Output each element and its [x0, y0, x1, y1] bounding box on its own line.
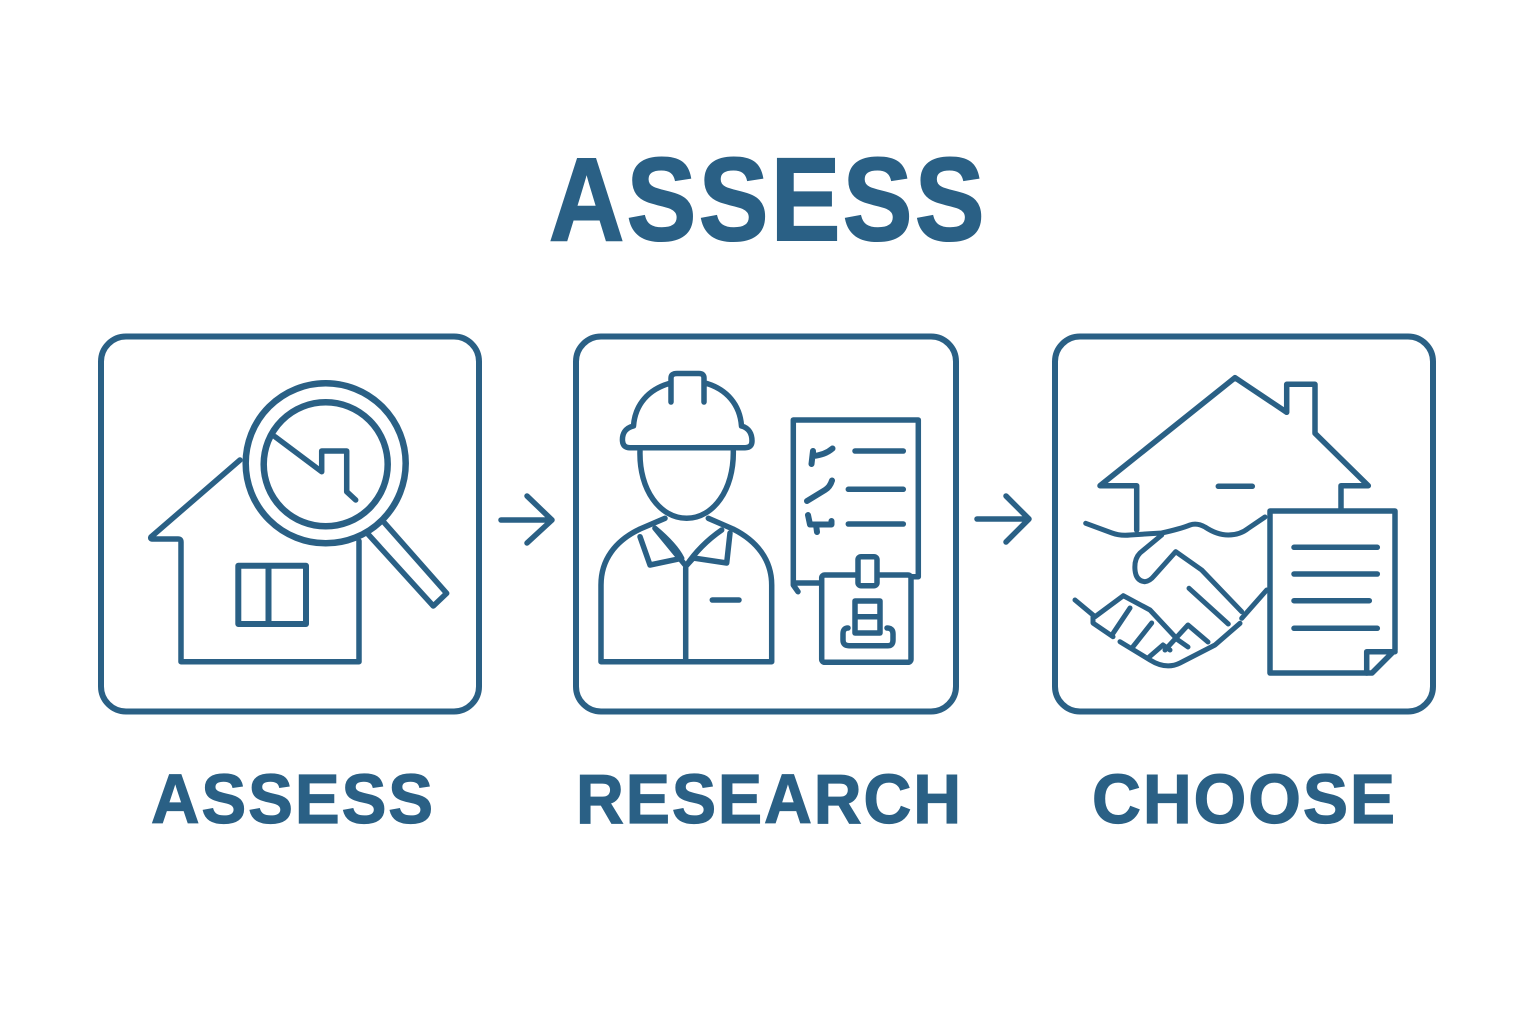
panel frame: research: [576, 336, 956, 712]
hard hat: [622, 374, 752, 448]
right cuff: [1242, 590, 1267, 618]
face: [640, 451, 733, 518]
palm crease: [1189, 588, 1228, 624]
pocket: [712, 597, 739, 603]
panel: choose: [1055, 336, 1433, 712]
icon: handshake: [1075, 517, 1267, 666]
icon: worker: [601, 374, 772, 662]
icon: house: [1100, 378, 1368, 530]
stamp base: [843, 628, 893, 646]
label: assess: ASSESS: [151, 760, 435, 838]
panel: assess: [101, 336, 479, 712]
icon: house with magnifying glass: [151, 383, 447, 662]
document sheet: [1270, 511, 1395, 673]
house outline: [151, 460, 359, 662]
label: research: RESEARCH: [576, 760, 963, 838]
check marks: [807, 448, 832, 532]
upper hand: [1135, 535, 1242, 612]
house outline: [1100, 378, 1368, 530]
fingers: [1113, 608, 1208, 658]
stamp: [855, 601, 880, 633]
magnifier lens: [246, 383, 406, 543]
label: choose: CHOOSE: [1092, 760, 1397, 838]
panel: research: [576, 336, 956, 712]
shirt centre line: [683, 568, 688, 660]
panel frame: assess: [101, 336, 479, 712]
upper sleeve line: [1086, 517, 1265, 535]
badge card: [822, 575, 911, 662]
lower hand: [1075, 596, 1240, 666]
panel frame: choose: [1055, 336, 1433, 712]
arrow: assess to research: [501, 496, 552, 543]
badge clip: [858, 557, 877, 586]
roof detail in lens: [275, 437, 356, 500]
body: [601, 518, 772, 662]
clipboard sheet: [793, 420, 918, 592]
arrow: research to choose: [977, 496, 1029, 542]
magnifier handle: [367, 519, 447, 606]
checklist lines: [848, 451, 903, 524]
house dash: [1218, 484, 1252, 489]
document lines: [1294, 547, 1377, 628]
title: ASSESS: [549, 134, 987, 266]
collar: [640, 528, 730, 566]
icon: contract document: [1270, 511, 1395, 673]
folded corner: [1367, 652, 1395, 673]
icon: checklist clipboard: [793, 420, 918, 662]
house window: [238, 566, 306, 624]
